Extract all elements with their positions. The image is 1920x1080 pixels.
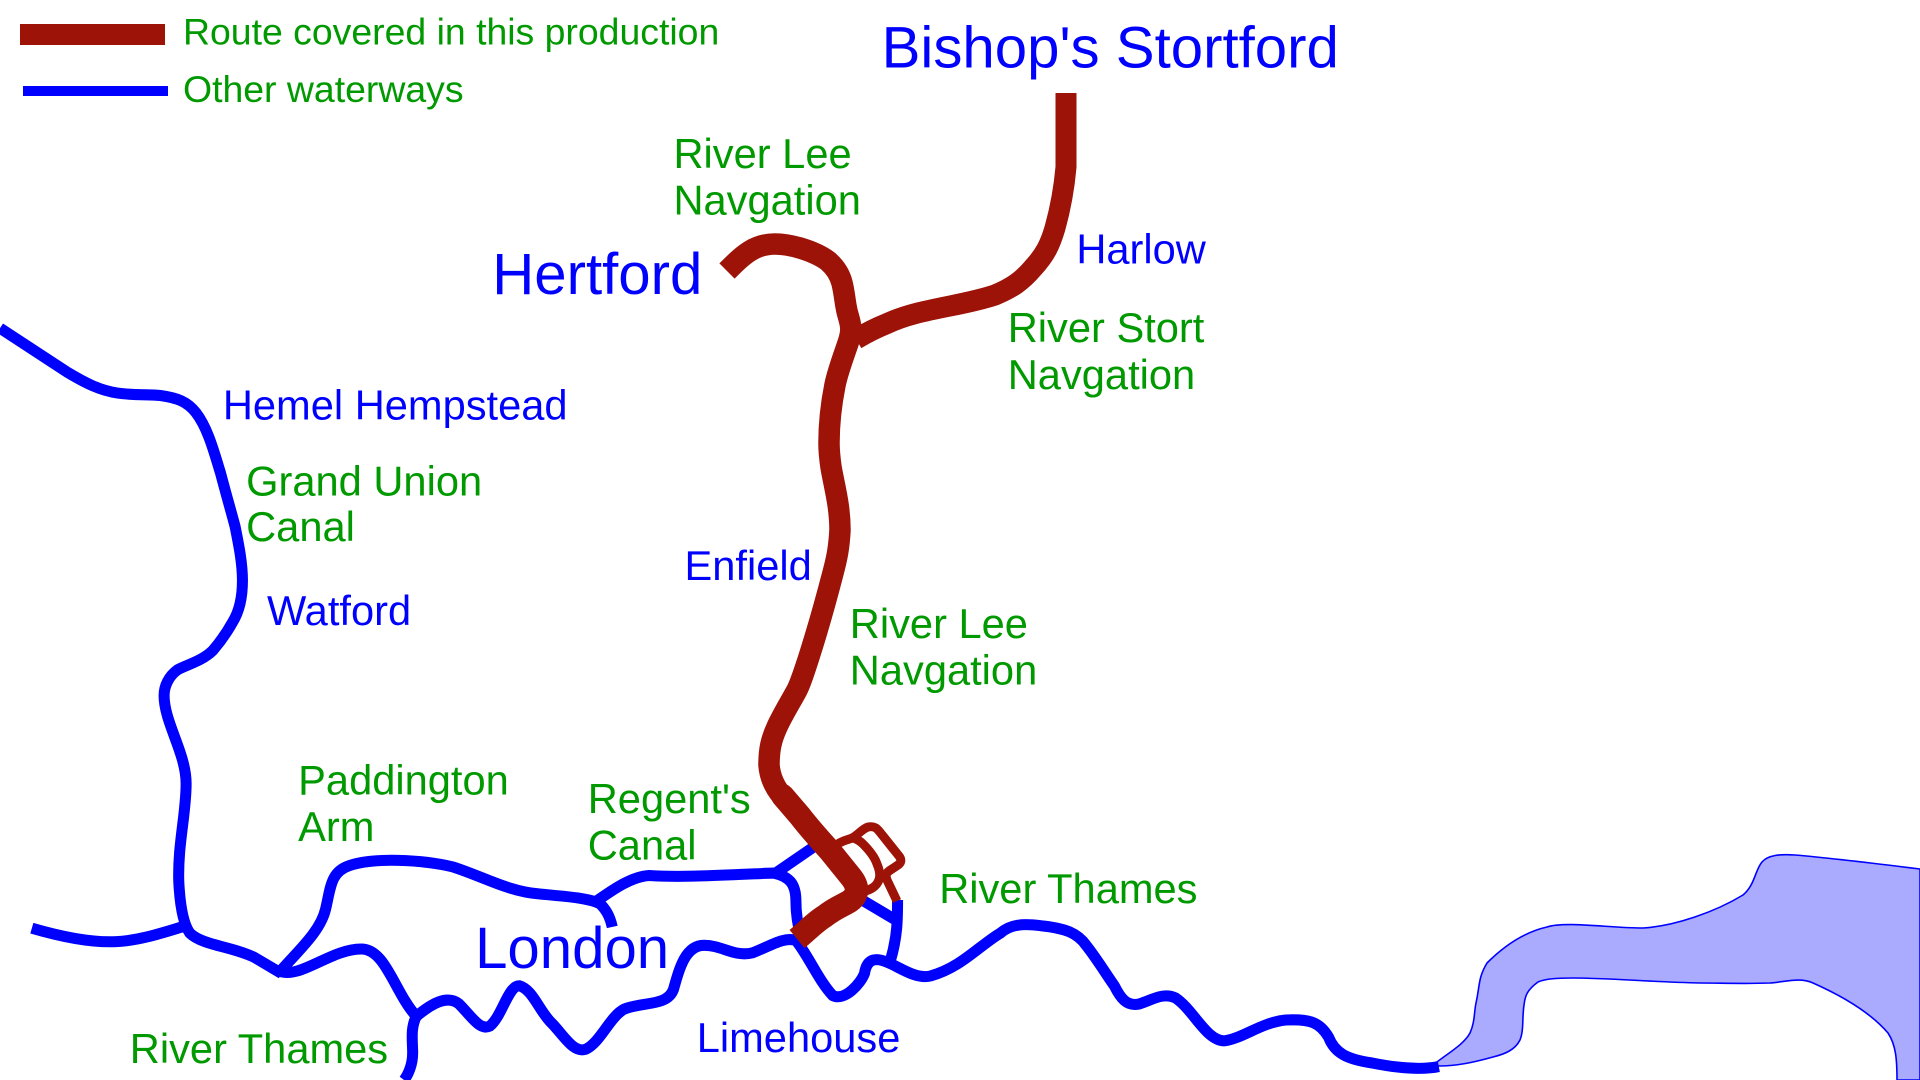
Paddington Arm xyxy=(282,860,612,970)
legend xyxy=(20,10,719,110)
label: River Lee Navigation south: River Lee xyxy=(850,600,1028,647)
label: River Stort Navigation: River Stort xyxy=(1008,304,1204,351)
place: Bishop's Stortford: Bishop's Stortford xyxy=(882,15,1339,80)
legend text: waterways: Other waterways xyxy=(183,68,464,110)
River Lee north and Hertford arm xyxy=(727,244,851,797)
label: Regent's Canal: Canal xyxy=(588,822,697,869)
place: Hemel Hempstead: Hemel Hempstead xyxy=(223,381,568,428)
River Thames west xyxy=(279,925,1439,1068)
label: River Lee Navigation north: River Lee xyxy=(673,130,852,177)
place: London: London xyxy=(475,916,669,981)
River Stort Navigation xyxy=(856,93,1066,339)
legend swatch: route xyxy=(20,24,165,45)
route covered in this production xyxy=(727,93,1066,939)
label: Grand Union Canal: Grand Union xyxy=(246,457,482,504)
label: River Thames west: River Thames xyxy=(130,1025,388,1072)
Limehouse channel xyxy=(890,900,898,961)
place: Limehouse: Limehouse xyxy=(697,1014,900,1061)
place: Hertford: Hertford xyxy=(492,242,702,307)
label: River Lee Navigation north: Navgation xyxy=(673,176,861,223)
western branch xyxy=(32,926,186,942)
junction blend xyxy=(770,784,794,806)
canal link xyxy=(774,847,813,874)
place: Watford: Watford xyxy=(267,587,411,634)
label: River Thames east: River Thames xyxy=(939,865,1198,912)
Grand Union Canal xyxy=(0,328,282,973)
label: Grand Union Canal: Canal xyxy=(246,503,355,550)
label: Regent's Canal: Regent's xyxy=(588,775,751,822)
label: River Lee Navigation south: Navgation xyxy=(850,646,1037,693)
lock loop inner xyxy=(853,838,880,893)
Thames south bend xyxy=(404,1016,416,1080)
map labels xyxy=(130,15,1339,1072)
legend swatch: waterways xyxy=(23,86,168,96)
lock loop outer xyxy=(835,827,901,901)
label: Paddington Arm: Arm xyxy=(298,803,374,850)
Limehouse cut xyxy=(862,900,895,920)
label: River Stort Navigation: Navgation xyxy=(1008,351,1195,398)
place: Harlow: Harlow xyxy=(1076,225,1207,272)
Thames estuary xyxy=(1437,855,1920,1080)
Regent's Canal xyxy=(596,873,801,938)
place: Enfield: Enfield xyxy=(684,542,812,589)
label: Paddington Arm: Paddington xyxy=(298,757,509,804)
River Lee lower section xyxy=(782,795,857,939)
legend text: route: Route covered in this production xyxy=(183,10,719,52)
other waterways xyxy=(0,328,1439,1080)
